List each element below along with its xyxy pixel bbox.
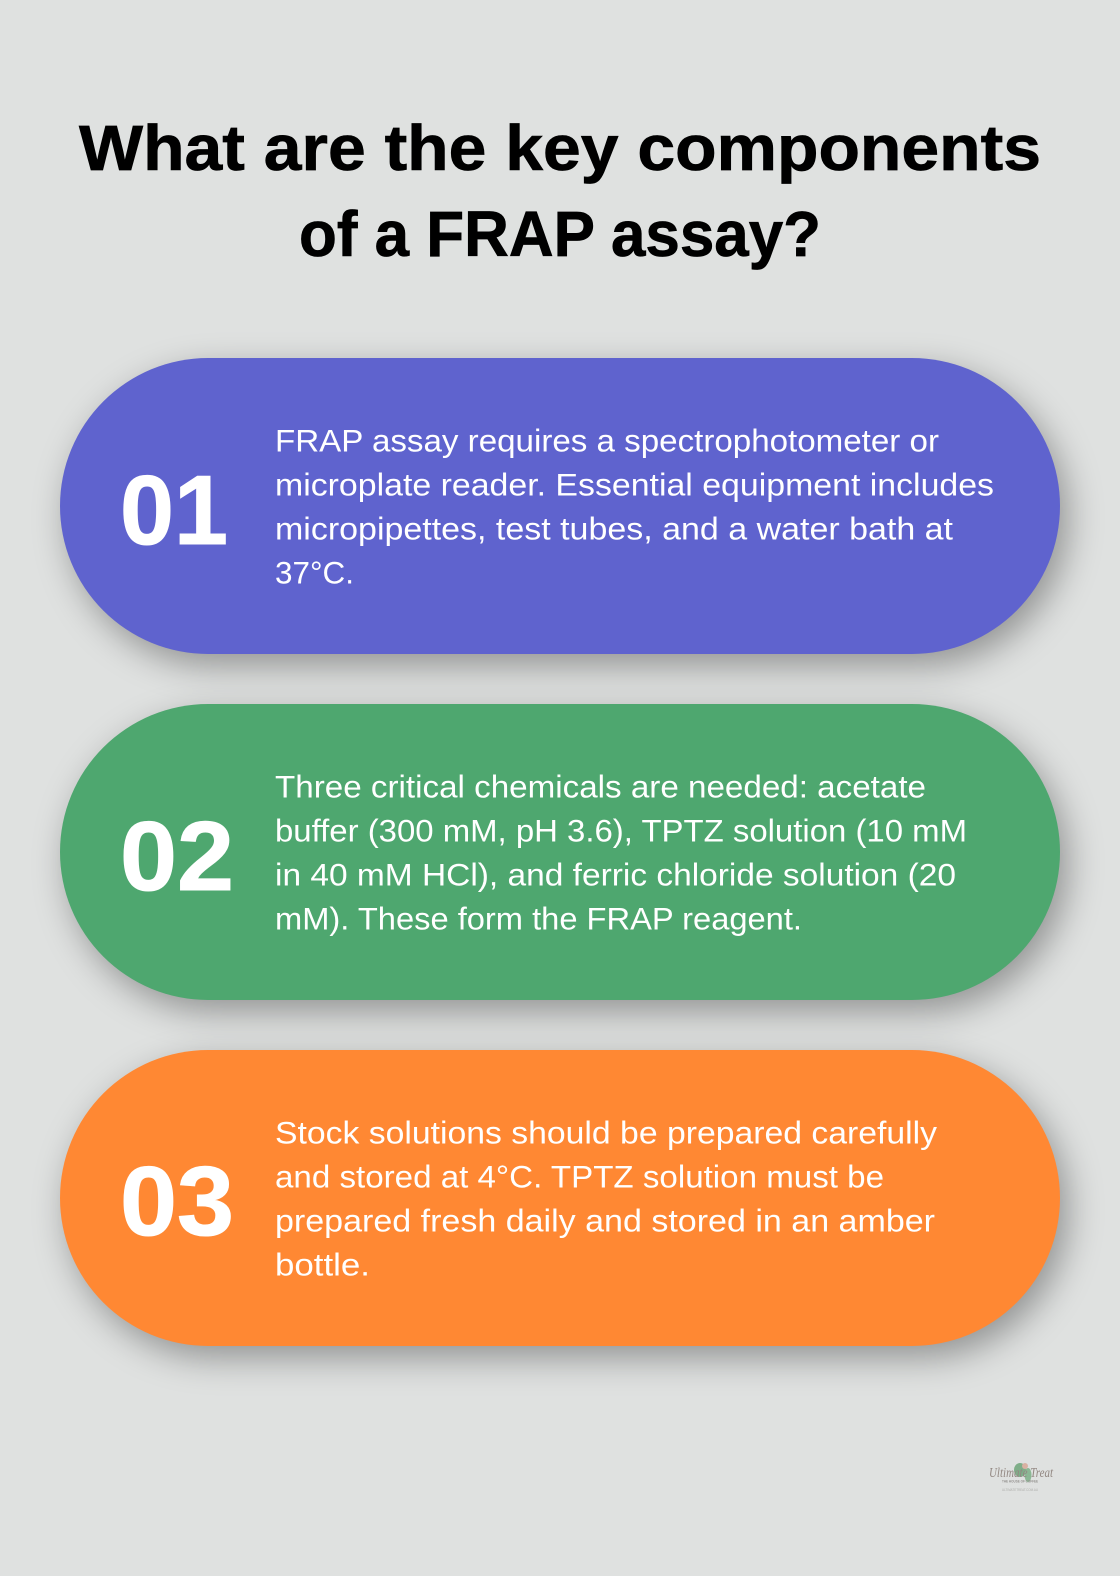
step 02 description: in 40 mM HCl), and ferric chloride solution (20 (275, 856, 956, 892)
step 03 description (275, 1114, 937, 1282)
panel: step 02 (60, 704, 1060, 1000)
step 03 description: prepared fresh daily and stored in an amber (275, 1202, 935, 1238)
step 01 description (275, 422, 994, 590)
step 03 description: bottle. (275, 1246, 370, 1282)
step 01 description: 37°C. (275, 554, 354, 590)
step 02 description (275, 768, 967, 936)
step number 03: 03 (120, 1146, 234, 1256)
step 02 description: mM). These form the FRAP reagent. (275, 900, 802, 936)
step number 01: 01 (120, 455, 228, 565)
panel: step 01 (60, 358, 1060, 654)
step 03 description: and stored at 4°C. TPTZ solution must be (275, 1158, 884, 1194)
logo (989, 1463, 1054, 1492)
step 02 description: buffer (300 mM, pH 3.6), TPTZ solution (10 mM (275, 812, 967, 848)
step 01 description: FRAP assay requires a spectrophotometer or (275, 422, 939, 458)
step 01 description: microplate reader. Essential equipment includes (275, 466, 994, 502)
title (79, 112, 1041, 270)
title: of a FRAP assay? (299, 198, 821, 270)
orange pill background (60, 1050, 1060, 1346)
purple pill background (60, 358, 1060, 654)
step 02 description: Three critical chemicals are needed: acetate (275, 768, 926, 804)
step 03 description: Stock solutions should be prepared carefully (275, 1114, 937, 1150)
step 01 description: micropipettes, test tubes, and a water bath at (275, 510, 953, 546)
icon: logo leaves (1014, 1463, 1032, 1482)
green pill background (60, 704, 1060, 1000)
logo wordmark: Ultimate Treat (989, 1466, 1054, 1481)
logo tagline: THE HOUSE OF COFFEE (1002, 1480, 1039, 1484)
title: What are the key components (79, 112, 1041, 184)
step number 02: 02 (120, 801, 234, 911)
logo web address: ULTIMATETREAT.COM.AU (1002, 1488, 1038, 1492)
panel: step 03 (60, 1050, 1060, 1346)
